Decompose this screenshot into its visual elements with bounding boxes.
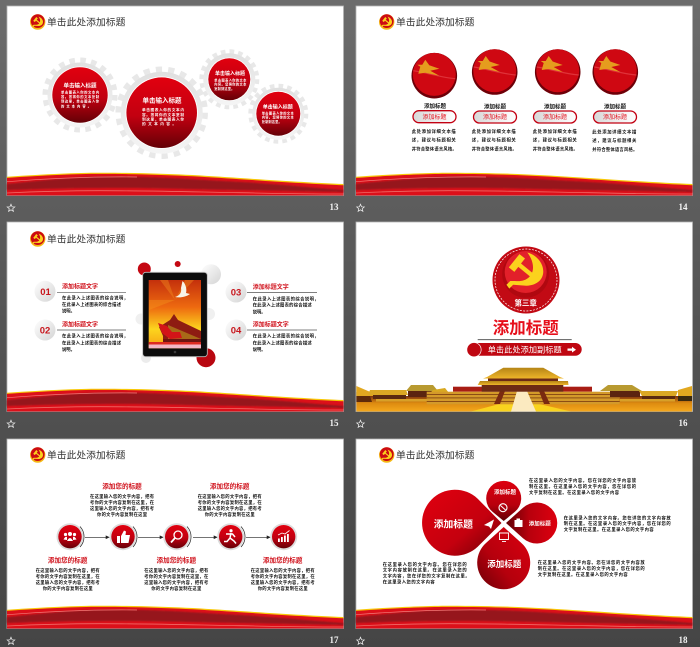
petal: right bbox=[506, 502, 557, 544]
badge column 4: 述，建议与标题相关 bbox=[592, 137, 637, 144]
text block: top 1: 你的文字内容复制在这里 bbox=[97, 511, 148, 518]
heading: 单击此处添加标题 bbox=[47, 16, 126, 29]
text block: top 2: 在这里输入您的文字内容，把有 bbox=[198, 493, 262, 500]
text block: bottom 2: 添加您的标题 bbox=[157, 556, 196, 564]
wave ribbon bbox=[356, 606, 692, 628]
text block: bottom 3 bbox=[251, 556, 315, 592]
icon: footer star bbox=[7, 637, 15, 644]
petal: bottom: 添加标题 bbox=[487, 559, 522, 569]
text block: bottom 1 bbox=[36, 556, 100, 592]
gear 2: 到这里，单击图表入你 bbox=[142, 116, 184, 121]
badge column 3: 添加标题 bbox=[543, 113, 567, 121]
text block: bottom 3: 考你的文字内容复制在这里，在 bbox=[251, 573, 315, 580]
item 04: 在此录入上述图表的综合说明， bbox=[253, 333, 319, 340]
page number 18: 18 bbox=[678, 635, 688, 645]
gear 2: 容。您将你的文本复制 bbox=[142, 112, 184, 117]
item 02: 在此录入上述图表的综合描述 bbox=[62, 339, 122, 346]
badge column 2: 述，建议与标题相关 bbox=[472, 136, 516, 144]
gear 1: 到这里，单击图表入你 bbox=[61, 99, 100, 104]
page number 13: 13 bbox=[330, 202, 339, 212]
item 01: 在此录入上述图表的综合描述 bbox=[62, 301, 122, 308]
chapter title: 添加标题 bbox=[493, 318, 559, 337]
icon: party emblem bbox=[30, 447, 45, 463]
badge column 4 bbox=[592, 49, 638, 153]
wave ribbon bbox=[7, 389, 344, 412]
text block: top 1: 添加您的标题 bbox=[102, 482, 142, 490]
wave ribbon bbox=[7, 173, 344, 196]
subtitle pill: 单击此处添加副标题 bbox=[488, 344, 562, 354]
gear 4: 单击图表入你的文本 bbox=[262, 110, 295, 115]
item 04 bbox=[226, 320, 319, 353]
panel: slide 15 tablet bbox=[7, 222, 344, 412]
text block: bottom 2 bbox=[144, 556, 209, 592]
badge column 2: 此处添加详细文本描 bbox=[472, 128, 516, 135]
badge column 3: 添加标题 bbox=[544, 102, 566, 110]
text block: lower left: 在这里录入您的文字内容。您在详您的 bbox=[383, 561, 467, 568]
gear 1: 的文本内容。 bbox=[61, 103, 91, 108]
text block: top 2 bbox=[198, 482, 262, 518]
badge column 2 bbox=[472, 49, 518, 153]
gear 1 bbox=[46, 60, 114, 130]
gear 4: 单击输入标题 bbox=[263, 104, 293, 111]
item 01 bbox=[34, 281, 128, 315]
gear 1: 单击输入标题 bbox=[63, 81, 97, 89]
badge column 4: 添加标题 bbox=[603, 113, 627, 121]
item 04: 04 bbox=[231, 326, 242, 336]
wave ribbon bbox=[7, 606, 344, 628]
item 04: 在此录入上述图表的综合描述 bbox=[253, 339, 312, 346]
text block: bottom 1: 你的文字内容复制在这里 bbox=[43, 585, 93, 592]
text block: top right bbox=[529, 477, 637, 496]
text block: top right: 在这里录入您的文字内容。您在详您的文字内容放 bbox=[529, 477, 637, 484]
item 01: 在此录入上述图表的综合说明， bbox=[62, 295, 128, 302]
page number 15: 15 bbox=[330, 418, 339, 428]
item 02: 说明。 bbox=[62, 346, 75, 353]
panel: slide 16 chapter bbox=[356, 222, 692, 412]
gear 2: 单击输入标题 bbox=[142, 96, 182, 104]
badge column 2: 添加标题 bbox=[483, 113, 507, 121]
text block: bottom 2: 考你的文字内容复制在这里，在 bbox=[144, 573, 209, 580]
text block: bottom 3: 这里输入您的文字内容，把有考 bbox=[251, 579, 315, 586]
step node: people bbox=[56, 523, 84, 550]
gear 3: 复制到这里。 bbox=[214, 86, 234, 91]
item 03: 添加标题文字 bbox=[253, 283, 289, 291]
gear 1: 容。您将你的文本复制 bbox=[61, 94, 100, 99]
text block: lower left bbox=[383, 561, 470, 586]
text block: bottom 2: 这里输入您的文字内容，把有考 bbox=[144, 579, 209, 586]
panel: slide 17 process bbox=[7, 439, 344, 628]
item 03: 在此录入上述图表的综合说明， bbox=[253, 295, 319, 302]
badge column 3 bbox=[533, 49, 580, 153]
panel: slide 14 four badges bbox=[356, 6, 692, 196]
badge column 2: 添加标题 bbox=[484, 102, 506, 110]
icon: footer star bbox=[357, 204, 364, 211]
gear 2: 的文本内容。 bbox=[142, 121, 176, 126]
tablet with palace picture bbox=[143, 272, 207, 357]
text block: top 2: 考你的文字内容复制在这里，在 bbox=[198, 499, 262, 506]
text block: top 2: 你的文字内容复制在这里 bbox=[205, 511, 255, 518]
badge column 1: 此处添加详细文本描 bbox=[412, 128, 456, 135]
item 03: 在此录入上述图表的综合描述 bbox=[253, 302, 312, 309]
text block: bottom 3: 在这里输入您的文字内容，把有 bbox=[251, 567, 315, 574]
icon: party emblem bbox=[30, 231, 45, 247]
text block: lower left: 文字内容放制在这里。在这里录入您的 bbox=[383, 566, 467, 574]
text block: bottom 1: 考你的文字内容复制在这里，在 bbox=[36, 573, 100, 580]
petal: left bbox=[422, 490, 502, 556]
badge column 1: 添加标题 bbox=[424, 102, 446, 110]
item 04: 说明。 bbox=[253, 346, 266, 353]
text block: bottom 3: 你的文字内容复制在这里 bbox=[258, 585, 308, 592]
item 03: 03 bbox=[231, 288, 241, 298]
text block: top right: 制在这里。在这里录入您的文字内容，您在详您的 bbox=[529, 483, 637, 490]
badge column 1 bbox=[412, 53, 457, 153]
badge column 3: 述，建议与标题相关 bbox=[533, 136, 577, 144]
text block: bottom 2: 你的文字内容复制在这里 bbox=[151, 585, 202, 592]
text block: top 2: 这里输入您的文字内容，把有考 bbox=[198, 505, 262, 512]
icon: party emblem bbox=[379, 14, 394, 30]
gear 2 bbox=[119, 70, 205, 156]
text block: middle right: 文字复制在这里。在这里录入您的文字内容 bbox=[564, 526, 654, 533]
item 01: 01 bbox=[40, 287, 51, 298]
text block: top 1: 在这里输入您的文字内容，把有 bbox=[90, 493, 155, 500]
chapter seal bbox=[492, 246, 560, 314]
palace image bbox=[356, 368, 692, 412]
text block: lower left: 在这里录入您的文字内容 bbox=[383, 578, 435, 586]
heading: 单击此处添加标题 bbox=[47, 449, 126, 462]
dove bbox=[175, 281, 190, 297]
item 01: 添加标题文字 bbox=[62, 282, 98, 290]
decorative circles behind tablet bbox=[136, 261, 221, 367]
step node: search bbox=[163, 523, 191, 550]
text block: lower right: 文字复制在这里。在这里录入您的文字内容 bbox=[538, 571, 628, 578]
item 03: 说明。 bbox=[253, 308, 266, 315]
step node: thumb up bbox=[110, 523, 137, 550]
text block: top 1: 考你的文字内容复制在这里，在 bbox=[90, 499, 155, 506]
icon: footer star bbox=[7, 420, 15, 427]
item 02: 02 bbox=[40, 326, 50, 336]
icon: footer star bbox=[7, 204, 15, 211]
arrow bbox=[138, 536, 163, 539]
heading: 单击此处添加标题 bbox=[396, 16, 475, 29]
badge column 1: 述，建议与标题相关 bbox=[412, 136, 456, 144]
page number 16: 16 bbox=[678, 418, 688, 428]
text block: top 1 bbox=[90, 482, 155, 518]
icon: party emblem bbox=[30, 14, 45, 30]
item 01: 说明。 bbox=[62, 308, 75, 315]
text block: lower right: 制在这里。在这里录入您的文字内容，您在详您的 bbox=[538, 565, 645, 572]
item 04: 添加标题文字 bbox=[253, 320, 289, 328]
icon: party emblem bbox=[379, 447, 394, 463]
text block: top right: 文字复制在这里。在这里录入您的文字内容 bbox=[529, 489, 620, 496]
text block: middle right bbox=[564, 514, 671, 533]
text block: middle right: 制在这里。在这里录入您的文字内容，您在详您的 bbox=[564, 520, 671, 527]
item 03 bbox=[226, 282, 319, 315]
item 02: 在此录入上述图表的综合说明， bbox=[62, 333, 128, 340]
item 02: 添加标题文字 bbox=[62, 320, 98, 328]
text block: bottom 3: 添加您的标题 bbox=[263, 556, 303, 564]
text block: lower left: 文字内容，您在详您的文字复制在这里。 bbox=[383, 572, 470, 580]
text block: bottom 1: 这里输入您的文字内容，把有考 bbox=[36, 579, 100, 586]
item 02 bbox=[34, 320, 128, 353]
petal: top: 添加标题 bbox=[494, 488, 516, 496]
gear 2: 单击图表入你的文本内 bbox=[142, 107, 184, 112]
text block: lower right: 在这里录入您的文字内容。您在详您的文字内容放 bbox=[538, 559, 645, 566]
arrow bbox=[246, 536, 270, 539]
petal: right: 添加标题 bbox=[529, 520, 551, 528]
text block: middle right: 在这里录入您的文字内容。您在详您的文字内容放 bbox=[564, 514, 671, 522]
badge column 4: 并符合整体语言风格。 bbox=[592, 146, 637, 153]
step node: runner bbox=[217, 523, 245, 550]
text block: top 1: 这里输入您的文字内容，把有考 bbox=[90, 505, 155, 512]
badge column 2: 并符合整体语言风格。 bbox=[472, 146, 517, 152]
heading: 单击此处添加标题 bbox=[47, 233, 126, 246]
panel: slide 18 petals bbox=[356, 439, 692, 628]
arrow bbox=[85, 536, 109, 539]
gear 3: 内容。您将你的文本 bbox=[214, 82, 247, 87]
step node: chart bbox=[270, 523, 297, 550]
text block: bottom 2: 在这里输入您的文字内容，把有 bbox=[144, 567, 209, 574]
text block: bottom 1: 在这里输入您的文字内容，把有 bbox=[36, 567, 100, 574]
badge column 4: 此处添加详细文本描 bbox=[592, 128, 637, 136]
gear 3: 单击输入标题 bbox=[215, 70, 245, 77]
heading: 单击此处添加标题 bbox=[396, 449, 475, 462]
petal: left: 添加标题 bbox=[434, 517, 473, 530]
wave ribbon bbox=[356, 173, 692, 196]
page number 17: 17 bbox=[330, 635, 339, 645]
gear 3: 单击图表入你的文本 bbox=[214, 77, 247, 82]
text block: top 2: 添加您的标题 bbox=[210, 482, 250, 490]
page number 14: 14 bbox=[678, 202, 688, 212]
text block: bottom 1: 添加您的标题 bbox=[48, 556, 88, 564]
petal: bottom bbox=[477, 527, 530, 589]
petal: top bbox=[486, 481, 521, 521]
gear 3 bbox=[202, 52, 257, 107]
subtitle pill bbox=[466, 342, 582, 357]
badge column 3: 并符合整体语言风格。 bbox=[533, 146, 578, 152]
gear 1: 单击图表入你的文本内 bbox=[61, 89, 100, 94]
badge column 4: 添加标题 bbox=[604, 102, 626, 110]
icon: footer star bbox=[357, 420, 364, 427]
badge column 1: 添加标题 bbox=[422, 113, 447, 121]
icon: footer star bbox=[357, 637, 364, 644]
gate tower bbox=[159, 314, 201, 344]
badge column 3: 此处添加详细文本描 bbox=[533, 128, 577, 135]
badge column 1: 并符合整体语言风格。 bbox=[412, 146, 457, 152]
gear 4: 复制到这里。 bbox=[262, 119, 282, 124]
gear 4 bbox=[251, 86, 306, 141]
divider line bbox=[478, 339, 572, 341]
gear 4: 内容。您将你的文本 bbox=[262, 115, 295, 120]
panel: slide 13 gears bbox=[7, 6, 344, 196]
text block: lower right bbox=[538, 559, 645, 578]
arrow bbox=[193, 536, 217, 539]
chapter seal: 第三章 bbox=[514, 298, 537, 308]
